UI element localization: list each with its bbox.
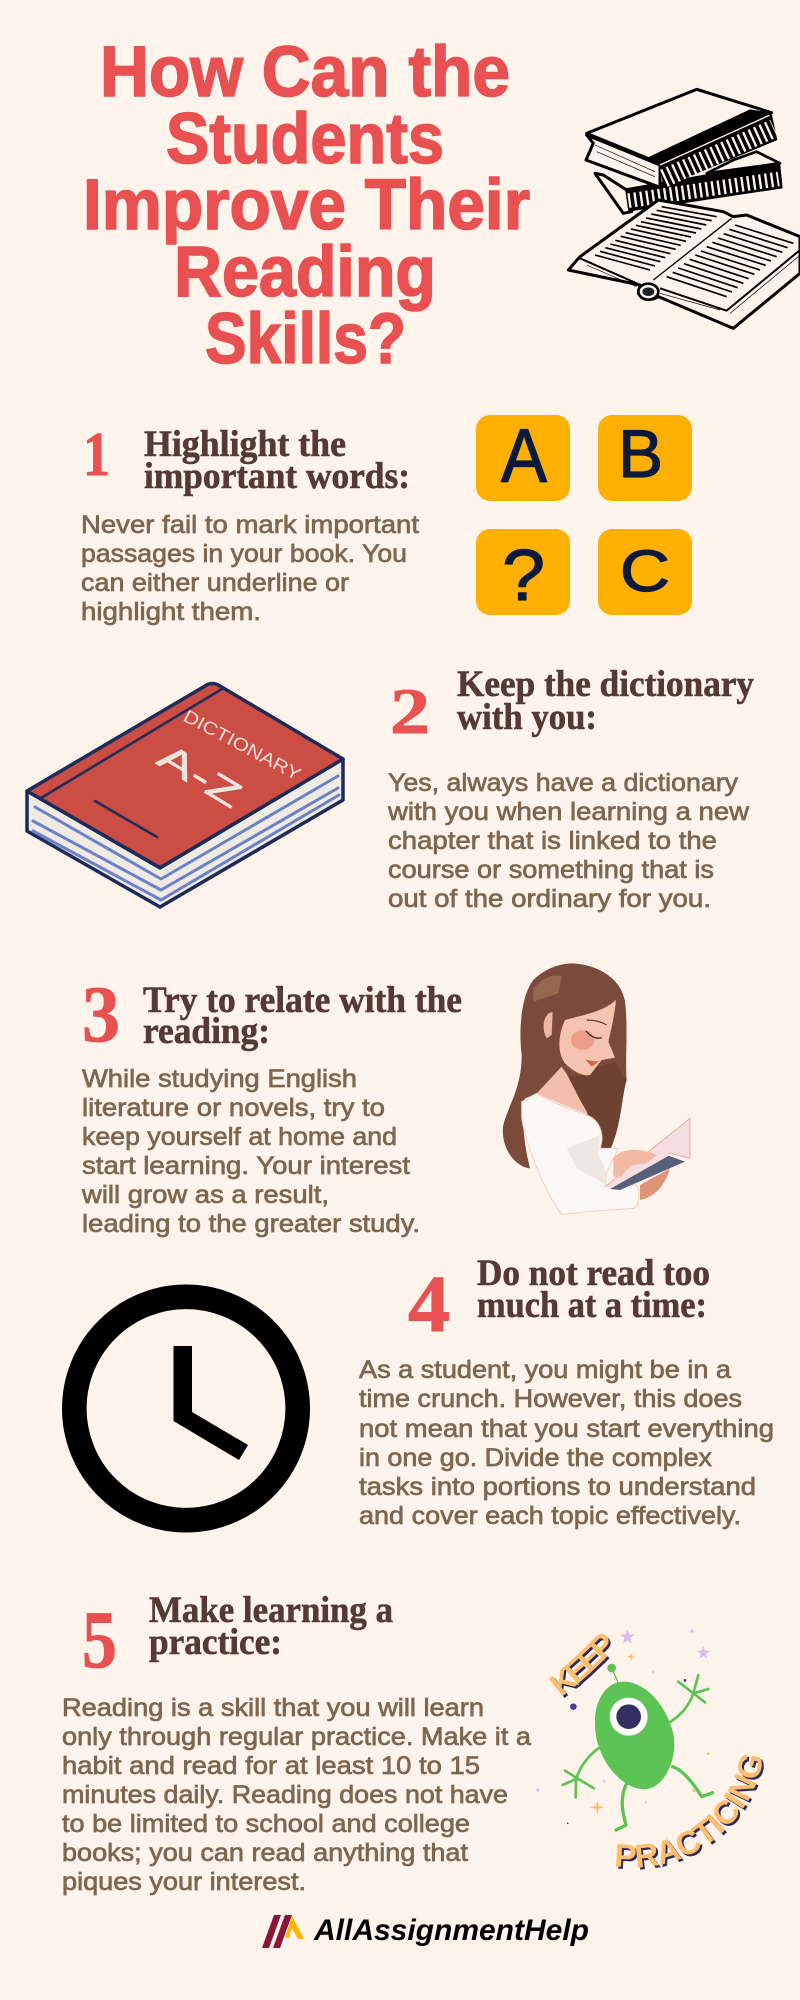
body text 2: course or something that is [388,856,714,884]
letter tiles: ? [502,536,545,616]
heading 1: Highlight the [144,424,346,465]
body text 1: can either underline or [81,569,349,597]
heading 4: Do not read too [477,1253,710,1294]
body text 5: to be limited to school and college [62,1810,470,1838]
heading 5: practice: [149,1622,282,1663]
body text 5: Reading is a skill that you will learn [62,1694,484,1722]
body text 1: passages in your book. You [81,540,407,568]
heading 3: reading: [143,1011,270,1052]
section 3: relate [81,963,690,1238]
body text 5: piques your interest. [62,1868,306,1896]
heading 3 [143,980,462,1052]
heading 2 [457,664,754,738]
title: Improve Their [83,166,530,245]
body text 4 [359,1356,774,1530]
body text 3 [81,1065,420,1238]
heading 1: important words: [144,456,410,497]
heading 2: Keep the dictionary [457,664,754,705]
icon: stack of books [568,89,800,328]
illustration: keep practicing monster: KEEP [549,1634,609,1696]
title: Skills? [205,300,406,379]
body text 2 [387,769,750,913]
heading 2: with you: [457,697,597,738]
body text 4: tasks into portions to understand [359,1473,756,1501]
letter tiles [476,414,692,616]
letter tiles: B [618,416,663,492]
body text 3: will grow as a result, [81,1181,329,1209]
body text 3: literature or novels, try to [82,1094,385,1122]
heading 1 [144,424,410,497]
body text 3: keep yourself at home and [82,1123,397,1151]
icon: dictionary book: DICTIONARY [180,706,304,785]
illustration: keep practicing monster: KEEP [554,1637,611,1698]
heading 3: Try to relate with the [143,980,462,1021]
body text 3: leading to the greater study. [82,1210,420,1238]
body text 4: in one go. Divide the complex [359,1444,713,1472]
body text 2: out of the ordinary for you. [388,885,711,913]
body text 2: with you when learning a new [387,798,750,826]
number 3: 3 [82,971,120,1059]
illustration: keep practicing monster: PRACTICING [618,1756,764,1870]
body text 1: highlight them. [81,598,261,626]
icon: clock [74,1297,298,1520]
title: Reading [174,233,436,312]
body text 2: Yes, always have a dictionary [388,769,739,797]
number 4: 4 [408,1261,450,1349]
number 1: 1 [83,421,110,489]
illustration: keep practicing monster [536,1629,764,1870]
icon: dictionary book [27,684,343,907]
body text 5: minutes daily. Reading does not have [62,1781,508,1809]
heading 5 [149,1590,393,1663]
body text 5: only through regular practice. Make it a [62,1723,531,1751]
body text 5 [62,1694,531,1896]
body text 4: As a student, you might be in a [359,1356,731,1384]
icon: dictionary book: A-Z [151,735,249,816]
body text 4: not mean that you start everything [359,1415,774,1443]
body text 4: time crunch. However, this does [359,1385,742,1413]
body text 1 [81,511,419,626]
body text 3: While studying English [82,1065,357,1093]
title [83,33,530,379]
title: How Can the [100,33,510,112]
section 2: dictionary [27,664,754,913]
heading 5: Make learning a [149,1590,393,1631]
body text 2: chapter that is linked to the [388,827,717,855]
section 4: do not read too much [74,1253,774,1530]
letter tiles: A [501,414,547,499]
heading 4 [477,1253,710,1326]
number 5: 5 [82,1594,117,1685]
letter tiles: C [620,539,670,604]
body text 1: Never fail to mark important [81,511,419,539]
title: Students [166,100,444,179]
body text 5: books; you can read anything that [62,1839,468,1867]
section 1: highlight [81,414,692,626]
body text 4: and cover each topic effectively. [359,1502,741,1530]
illustration: girl reading [503,963,690,1214]
heading 4: much at a time: [477,1285,707,1326]
section 5: practice [62,1590,764,1896]
logo: AllAssignmentHelp: AllAssignmentHelp [313,1914,589,1947]
body text 5: habit and read for at least 10 to 15 [62,1752,480,1780]
body text 3: start learning. Your interest [82,1152,410,1180]
illustration: keep practicing monster: PRACTICING [616,1754,762,1868]
number 2: 2 [390,676,430,748]
